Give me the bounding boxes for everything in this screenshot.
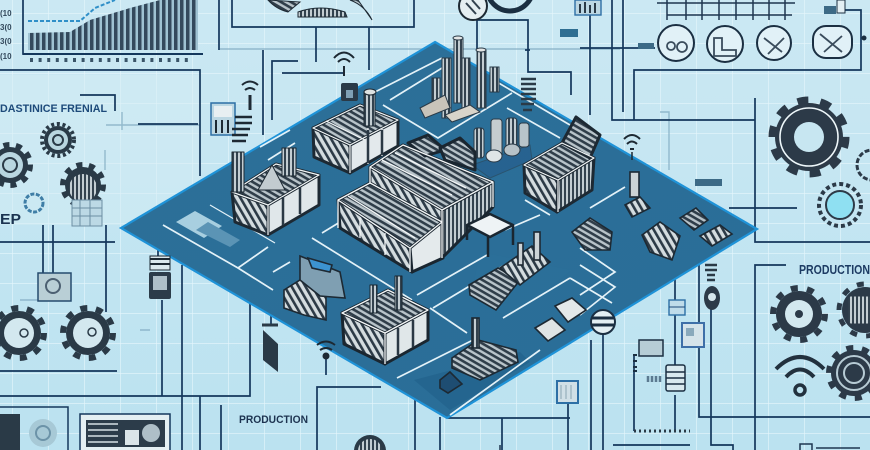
machinery: centre cluster (469, 232, 586, 341)
machinery: lower left (284, 256, 345, 320)
machinery: lower centre (440, 318, 518, 393)
storage tanks (472, 118, 532, 178)
factory building: right (524, 117, 600, 212)
gear: left with grid tower (63, 165, 103, 226)
icon: top circle badge (459, 0, 487, 20)
gear: lower left pair one (0, 308, 44, 358)
wifi icon: below platform (317, 342, 335, 358)
wifi icon: right platform (624, 135, 640, 160)
heading: left panel: DASTINICE FRENIAL (0, 103, 107, 115)
icon: top ring (487, 0, 533, 11)
large gear: right (772, 100, 846, 174)
gear: small outline (25, 194, 43, 212)
data box: bottom blue screen (557, 381, 578, 403)
wifi icon: left upper (242, 82, 258, 110)
connector: blue window box (682, 323, 704, 347)
data ticks: right lower (634, 430, 690, 432)
panel: top centre fan chart (268, 0, 372, 20)
gear: left edge (0, 145, 30, 185)
data tag: right lower bars (648, 376, 660, 382)
data tag: right middle (695, 179, 722, 186)
data box: left upper (211, 103, 235, 135)
central isometric factory platform (121, 36, 757, 418)
gear: glowing outline (819, 184, 861, 226)
gear: left upper small (42, 124, 74, 156)
panel: bottom left monitor (80, 414, 170, 450)
icon row: top right circles (658, 25, 852, 62)
data tags: top right (638, 0, 866, 49)
gear: lower left pair two (63, 308, 113, 358)
connector: list box (669, 300, 685, 315)
bar chart (0, 0, 203, 61)
canopy (467, 214, 513, 257)
bar chart: (10 (0, 9, 12, 18)
factory building: lower (342, 276, 428, 364)
machinery: right cluster (572, 172, 732, 260)
data box: top right small (575, 0, 601, 15)
connector: right stack and shield (704, 265, 720, 310)
connector: striped stack (666, 365, 685, 391)
roads (163, 58, 625, 415)
bar chart: (10 (0, 52, 12, 61)
gear: production chip (839, 284, 870, 336)
heading: lower production: PRODUCTION (239, 414, 308, 426)
icon: bottom centre dial (354, 435, 386, 450)
gear: right edge outline (857, 150, 870, 180)
connector: striped ball (591, 310, 615, 334)
gear: production lower (829, 348, 870, 398)
connector: small dashboard (633, 340, 663, 371)
bottom right structure (500, 444, 860, 450)
icon: small tower below platform (262, 325, 278, 372)
main factory hall (338, 135, 513, 272)
plug on platform edge (341, 83, 358, 101)
bar chart: 3(0 (0, 23, 12, 32)
icon: wifi (776, 357, 824, 395)
icon label: left EP: EP (0, 211, 21, 228)
factory: chimney cluster (420, 36, 499, 122)
panel: bottom left dashboard (0, 407, 68, 450)
wifi icon: top centre (334, 52, 354, 76)
panel: top right timeline (657, 0, 795, 20)
faint backing lines (20, 49, 720, 330)
factory building: far left (232, 148, 319, 235)
panel icon: flat legend on platform (176, 211, 240, 247)
stack connector: top centre right (521, 79, 536, 110)
bar chart: 3(0 (0, 37, 12, 46)
factory building: upper left (313, 89, 398, 173)
gear: production left (773, 288, 825, 340)
stack connector: left upper (232, 117, 252, 141)
icon: left chip box (38, 273, 71, 301)
connector plug: left of platform (149, 256, 171, 299)
data tag: top right small block (560, 29, 578, 37)
